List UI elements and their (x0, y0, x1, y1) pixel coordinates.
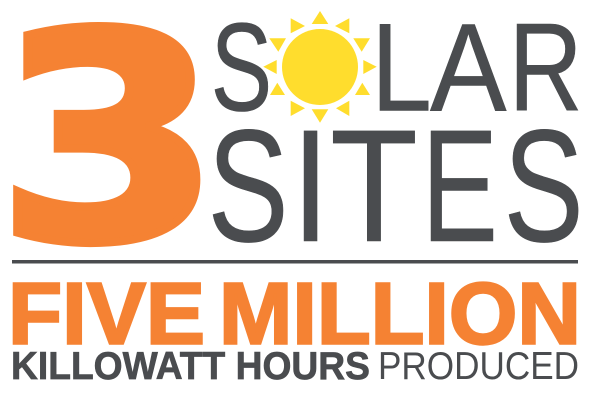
headline: FIVE MILLION: MILLION (219, 266, 581, 362)
heading word: SOLAR: L (371, 0, 432, 137)
heading word: SOLAR: S (211, 0, 272, 138)
divider rule (12, 260, 578, 264)
heading word: SOLAR: R (509, 0, 583, 138)
heading word: SITES: E (422, 97, 498, 276)
subheading: KILLOWATT HOURS PRODUCED (11, 345, 579, 388)
heading word: SITES: S (504, 96, 584, 275)
heading word: SITES: I (291, 96, 330, 275)
subheading: KILLOWATT HOURS PRODUCED: PRODUCED (378, 345, 579, 388)
heading word: SITES: T (330, 97, 418, 276)
icon: sun (263, 11, 377, 123)
headline: FIVE MILLION (8, 266, 581, 362)
heading word: SOLAR: A (430, 0, 507, 138)
heading word: SOLAR (211, 0, 583, 138)
heading word: SITES (208, 96, 584, 276)
heading word: SITES: S (208, 97, 289, 276)
subheading: KILLOWATT HOURS PRODUCED: KILLOWATT HOURS (11, 345, 370, 388)
headline: FIVE MILLION: FIVE (8, 266, 205, 362)
